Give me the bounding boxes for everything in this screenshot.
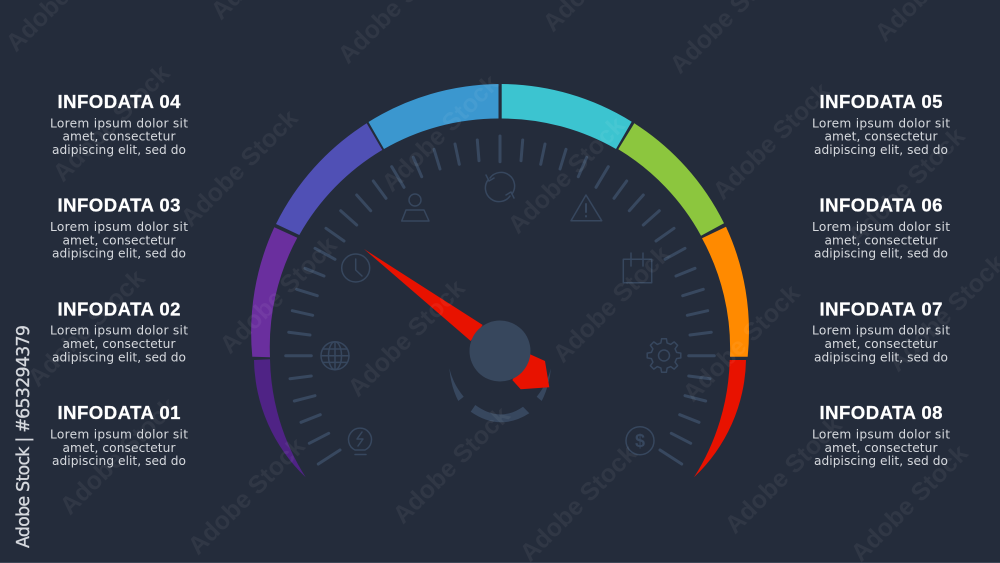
text block: infodata 08: Lorem ipsum dolor sit <box>812 427 950 441</box>
icon: gear <box>647 339 681 372</box>
gauge tick marks <box>286 136 714 464</box>
stock watermarks: Adobe Stock <box>214 231 342 359</box>
text block: infodata 06 <box>812 195 950 261</box>
text block: infodata 06: adipiscing elit, sed do <box>814 247 948 261</box>
text block: infodata 02: adipiscing elit, sed do <box>52 350 186 364</box>
text block: infodata 05 <box>812 91 950 157</box>
segment 08 red <box>694 360 746 477</box>
text block: infodata 06: INFODATA 06 <box>820 195 942 216</box>
text block: infodata 01: Lorem ipsum dolor sit <box>50 427 188 441</box>
stock watermarks: Adobe Stock <box>182 432 310 560</box>
text block: infodata 01 <box>50 402 188 468</box>
text block: infodata 04: Lorem ipsum dolor sit <box>50 116 188 130</box>
segment 04 blue <box>368 84 498 149</box>
text block: infodata 06: amet, consectetur <box>824 233 938 247</box>
text block: infodata 05: amet, consectetur <box>824 130 938 144</box>
text block: infodata 02: Lorem ipsum dolor sit <box>50 324 188 338</box>
icon: globe <box>321 342 349 370</box>
gauge arc: multicolour segments <box>251 84 749 477</box>
icon: calendar <box>623 253 652 283</box>
text block: infodata 08 <box>812 402 950 468</box>
text block: infodata 07 <box>812 298 950 364</box>
stock watermarks: Adobe Stock <box>342 274 470 402</box>
text block: infodata 08: INFODATA 08 <box>820 402 942 423</box>
stock watermarks: Adobe Stock <box>54 392 182 520</box>
text block: infodata 04: adipiscing elit, sed do <box>52 143 186 157</box>
stock watermarks: Adobe Stock <box>387 401 515 529</box>
text block: infodata 05: INFODATA 05 <box>820 91 942 112</box>
text block: infodata 07: INFODATA 07 <box>820 298 942 319</box>
text block: infodata 08: amet, consectetur <box>824 441 938 455</box>
text block: infodata 03: INFODATA 03 <box>58 195 180 216</box>
segment 01 dark violet <box>254 359 306 477</box>
icon: dollar: $ <box>635 431 645 451</box>
text block: infodata 07: Lorem ipsum dolor sit <box>812 324 950 338</box>
text block: infodata 03: amet, consectetur <box>62 233 176 247</box>
segment 03 indigo <box>276 123 382 235</box>
text block: infodata 02: amet, consectetur <box>62 337 176 351</box>
text block: infodata 07: adipiscing elit, sed do <box>814 350 948 364</box>
text block: infodata 06: Lorem ipsum dolor sit <box>812 220 950 234</box>
needle <box>364 249 549 389</box>
text block: infodata 02: INFODATA 02 <box>58 298 180 319</box>
text block: infodata 04: amet, consectetur <box>62 130 176 144</box>
text block: infodata 07: amet, consectetur <box>824 337 938 351</box>
text block: infodata 04: INFODATA 04 <box>58 91 181 112</box>
icon: refresh <box>485 172 515 202</box>
stock watermarks: Adobe Stock <box>707 77 835 205</box>
lower dial arcs <box>449 368 551 422</box>
stock watermarks: Adobe Stock <box>47 59 175 187</box>
text block: infodata 05: Lorem ipsum dolor sit <box>812 116 950 130</box>
needle hub <box>470 320 530 382</box>
text block: infodata 05: adipiscing elit, sed do <box>814 143 948 157</box>
text block: infodata 01: INFODATA 01 <box>58 402 180 423</box>
icon: warning triangle <box>571 195 602 221</box>
text block: infodata 03: adipiscing elit, sed do <box>52 247 186 261</box>
icon: dollar <box>626 427 654 455</box>
stock watermarks: Adobe Stock <box>22 264 150 392</box>
text block: infodata 01: adipiscing elit, sed do <box>52 454 186 468</box>
text block: infodata 04 <box>50 91 188 157</box>
icon: clock <box>342 254 370 282</box>
stock watermarks: Adobe Stock <box>175 104 303 232</box>
icon: light bulb <box>349 428 372 454</box>
stock watermarks: Adobe Stock <box>547 240 675 368</box>
stock watermarks: Adobe Stock <box>502 111 630 239</box>
segment 05 teal <box>502 84 632 149</box>
stock watermarks: Adobe Stock <box>677 279 805 407</box>
text block: infodata 03: Lorem ipsum dolor sit <box>50 220 188 234</box>
stock id label: Adobe Stock | #653294379 <box>14 325 34 548</box>
stock watermarks: Adobe Stock <box>719 411 847 539</box>
icon: user <box>402 194 429 221</box>
text block: infodata 02 <box>50 298 188 364</box>
text block: infodata 03 <box>50 195 188 261</box>
stock watermarks: Adobe Stock <box>842 122 970 250</box>
stock watermarks: Adobe Stock <box>376 69 504 197</box>
segment 06 green <box>618 123 724 236</box>
segment 02 violet <box>251 227 297 357</box>
text block: infodata 01: amet, consectetur <box>62 441 176 455</box>
text block: infodata 08: adipiscing elit, sed do <box>814 454 948 468</box>
segment 07 orange <box>702 227 749 357</box>
